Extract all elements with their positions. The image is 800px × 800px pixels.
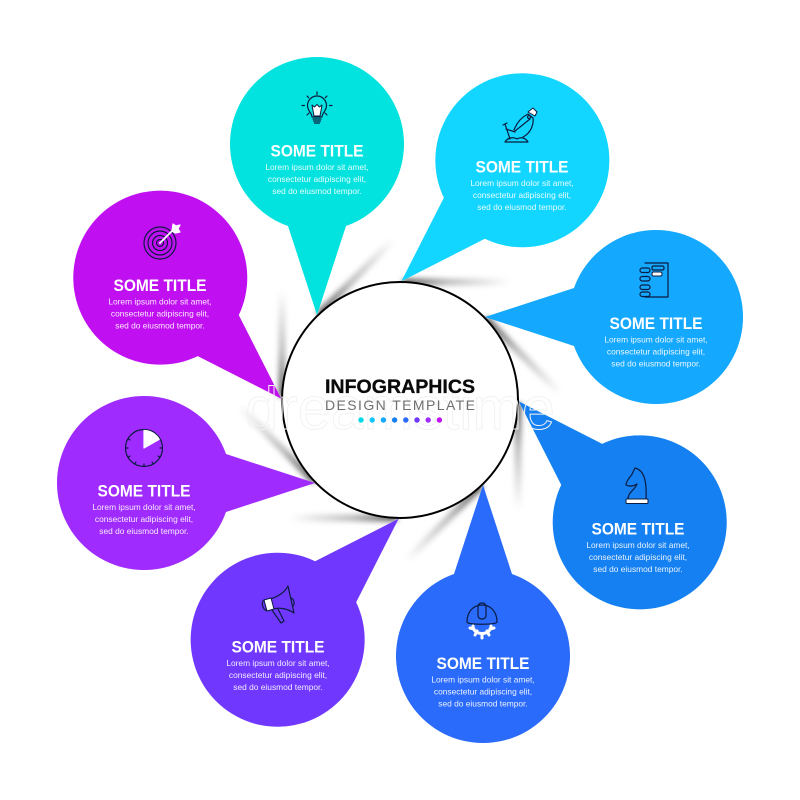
text block: sed do eiusmod tempor. [272, 186, 362, 196]
title: SOME TITLE [610, 315, 702, 333]
text block: sed do eiusmod tempor. [477, 202, 567, 212]
icon: notebook [640, 263, 668, 297]
icon: chess knight [626, 468, 648, 504]
text block: consectetur adipiscing elit, [473, 190, 571, 200]
text block: sed do eiusmod tempor. [99, 526, 189, 536]
text block: Lorem ipsum dolor sit amet, [604, 334, 708, 344]
dot row [358, 417, 442, 423]
shadows behind pointers [237, 237, 563, 563]
title: SOME TITLE [436, 655, 530, 673]
panel: blue bubble [457, 340, 763, 645]
subtitle: DESIGN TEMPLATE [325, 397, 475, 413]
text block: sed do eiusmod tempor. [115, 320, 205, 330]
text block: consectetur adipiscing elit, [589, 552, 687, 562]
text block: Lorem ipsum dolor sit amet, [586, 540, 690, 550]
title: infographics: INFOGRAPHICS [325, 376, 475, 398]
title: SOME TITLE [476, 158, 568, 176]
text block: consectetur adipiscing elit, [95, 514, 193, 524]
title: SOME TITLE [98, 482, 190, 500]
heading [325, 376, 475, 413]
text block: Lorem ipsum dolor sit amet, [108, 296, 212, 306]
icon: light bulb [302, 92, 332, 123]
text block: sed do eiusmod tempor. [438, 698, 528, 708]
text block: Lorem ipsum dolor sit amet, [92, 502, 196, 512]
icon: megaphone [262, 586, 294, 623]
panel: magenta bubble [37, 155, 343, 460]
panel: indigo bubble [155, 457, 460, 763]
panel: royal blue bubble [396, 485, 570, 743]
text block: sed do eiusmod tempor. [593, 564, 683, 574]
title: SOME TITLE [270, 142, 364, 160]
text block: Lorem ipsum dolor sit amet, [226, 658, 330, 668]
text block: Lorem ipsum dolor sit amet, [265, 162, 369, 172]
text block: consectetur adipiscing elit, [607, 346, 705, 356]
panel: sky blue bubble [485, 230, 743, 404]
text block: Lorem ipsum dolor sit amet, [470, 178, 574, 188]
text block: sed do eiusmod tempor. [611, 358, 701, 368]
text block: Lorem ipsum dolor sit amet, [431, 674, 535, 684]
title: SOME TITLE [232, 638, 324, 656]
text block: consectetur adipiscing elit, [111, 308, 209, 318]
text block: consectetur adipiscing elit, [434, 686, 532, 696]
text block: consectetur adipiscing elit, [229, 670, 327, 680]
panel: teal bubble [230, 57, 404, 315]
central circle [282, 282, 518, 518]
icon: microscope [503, 108, 537, 142]
title: SOME TITLE [114, 277, 206, 295]
icon: target with dart [144, 224, 180, 259]
text block: sed do eiusmod tempor. [233, 682, 323, 692]
title: SOME TITLE [592, 520, 684, 538]
panel: violet bubble [57, 396, 315, 570]
panel: cyan bubble [340, 37, 645, 343]
text block: consectetur adipiscing elit, [268, 174, 366, 184]
icon: helmet and gear [467, 603, 497, 638]
watermark: dreamstime [245, 375, 555, 442]
icon: clock [126, 430, 162, 466]
